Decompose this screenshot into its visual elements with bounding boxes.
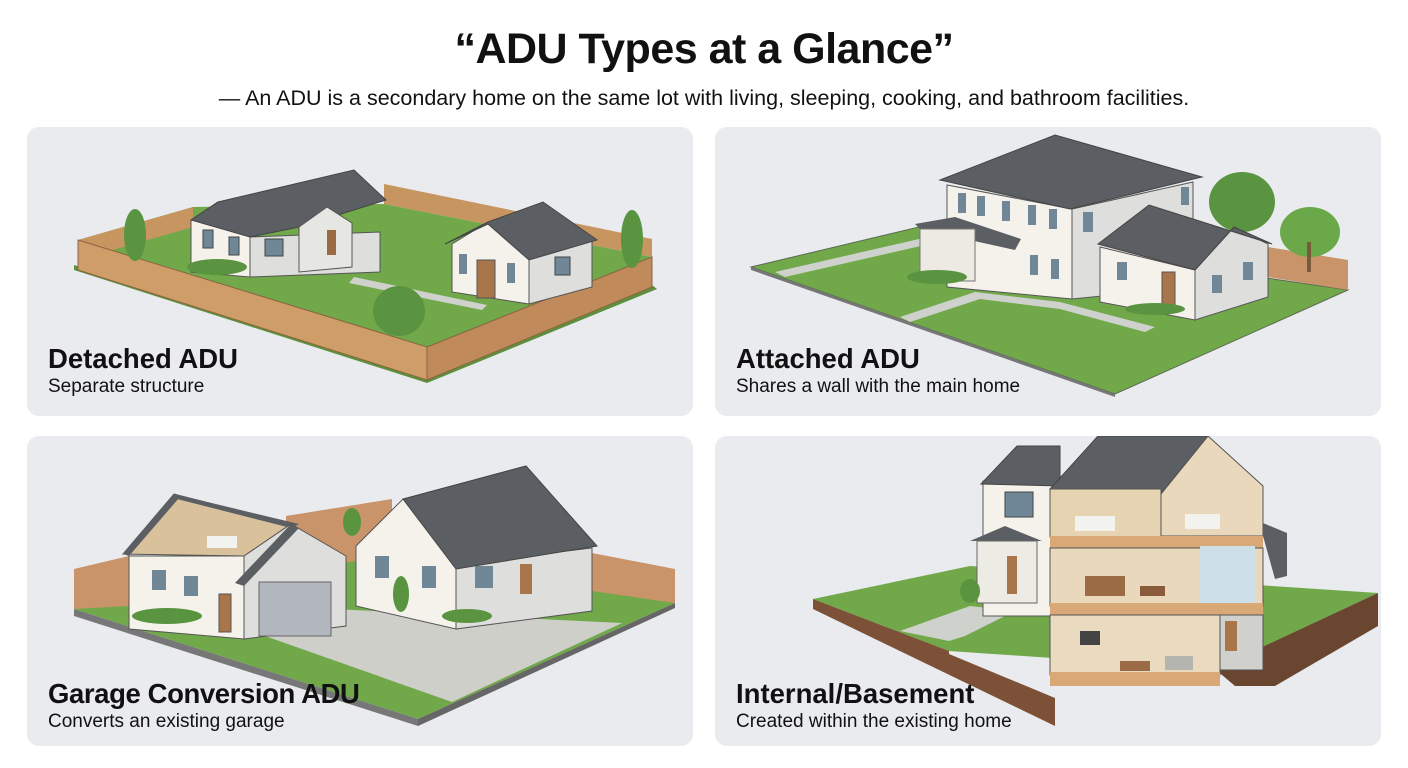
main house xyxy=(907,135,1202,299)
caption: Created within the existing home xyxy=(736,711,1012,732)
tree xyxy=(1209,172,1275,232)
panel: internal/basement xyxy=(715,436,1381,746)
cutaway house xyxy=(1050,436,1287,686)
side tower xyxy=(960,446,1060,616)
main house xyxy=(343,466,597,629)
label: Attached ADU xyxy=(736,343,920,374)
caption: Converts an existing garage xyxy=(48,711,285,732)
main house xyxy=(187,170,386,277)
illustration: attached ADU xyxy=(749,134,1350,397)
panel: detached ADU xyxy=(27,127,693,416)
illustration: basement cutaway xyxy=(813,436,1378,726)
label: Garage Conversion ADU xyxy=(48,678,360,709)
illustration: garage conversion xyxy=(74,465,675,726)
trees xyxy=(373,286,425,336)
panel: garage conversion xyxy=(27,436,693,746)
label: Internal/Basement xyxy=(736,678,974,709)
title: “ADU Types at a Glance” xyxy=(454,25,954,73)
caption: Shares a wall with the main home xyxy=(736,376,1020,397)
attached unit xyxy=(1098,205,1272,320)
illustration: detached ADU xyxy=(74,170,657,383)
caption: Separate structure xyxy=(48,376,204,397)
ADU xyxy=(445,202,597,304)
subtitle: — An ADU is a secondary home on the same lot with living, sleeping, cooking, and bathroom facilities. xyxy=(219,86,1189,110)
label: Detached ADU xyxy=(48,343,238,374)
garage house xyxy=(123,494,346,639)
panel: attached ADU xyxy=(715,127,1381,416)
